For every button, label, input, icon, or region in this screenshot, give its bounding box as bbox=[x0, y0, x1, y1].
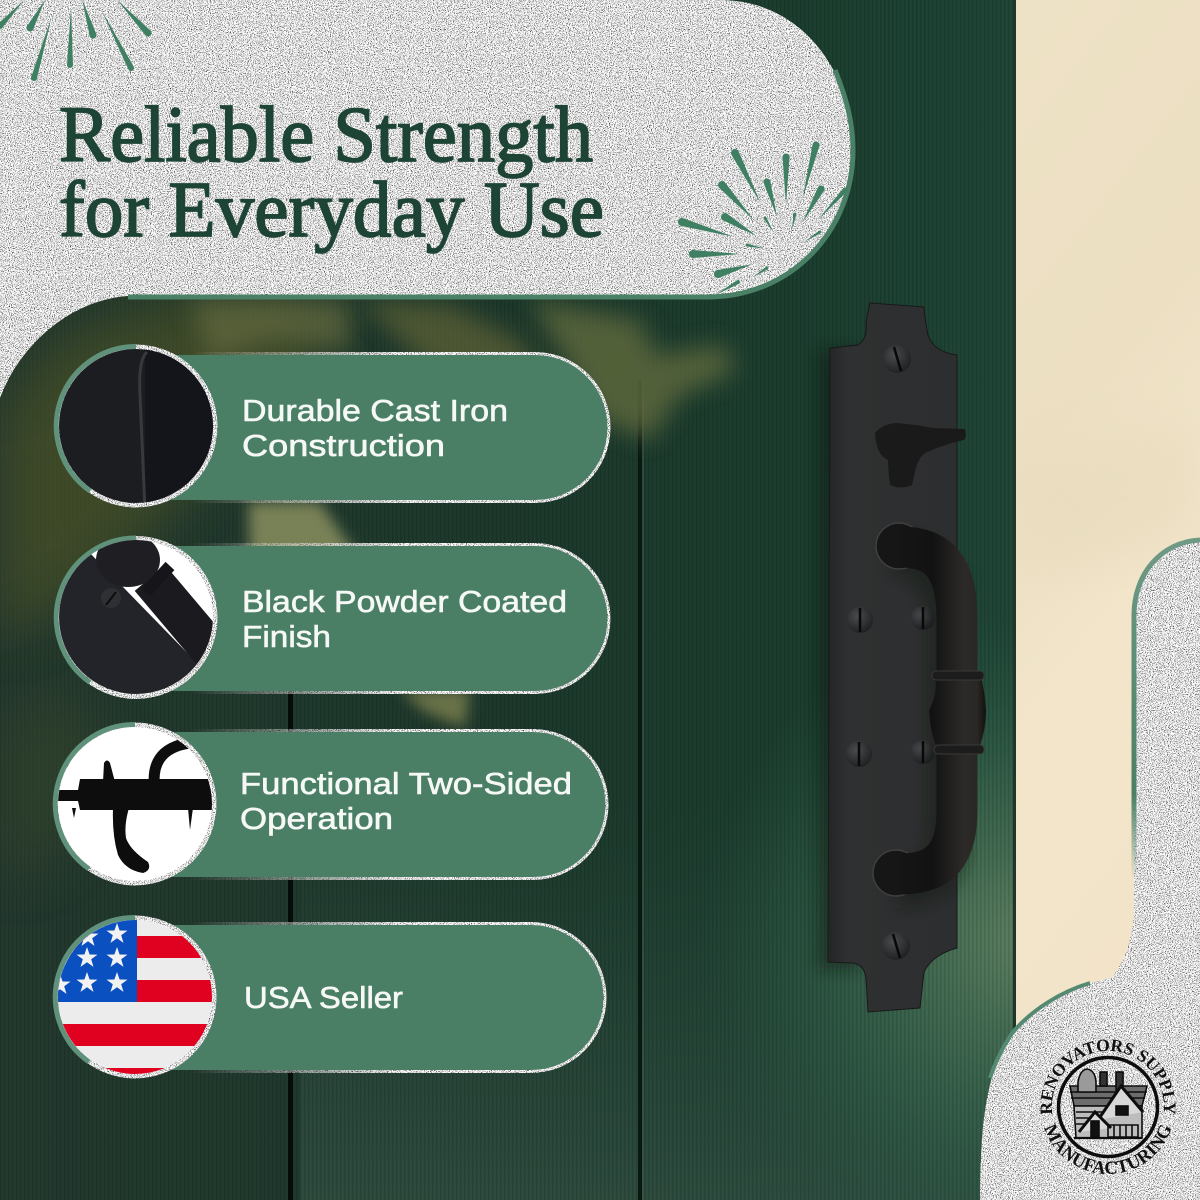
circular icon: American flag bbox=[50, 915, 219, 1083]
label: Functional Two-Sided bbox=[240, 766, 572, 801]
logo: Renovators Supply Manufacturing bbox=[1040, 1039, 1176, 1174]
circular photo: powder coated finish bbox=[50, 533, 220, 701]
feature 4: USA Seller bbox=[50, 915, 606, 1083]
label: Black Powder Coated bbox=[242, 584, 567, 619]
middle lower screws bbox=[846, 740, 935, 767]
bottom screw bbox=[882, 932, 910, 960]
feature 1: Durable Cast Iron Construction bbox=[54, 344, 610, 510]
label: Finish bbox=[242, 619, 331, 654]
door hardware: cast iron thumb-latch pull handle bbox=[818, 303, 986, 1012]
panel: title banner bbox=[0, 0, 853, 398]
logo house illustration bbox=[1070, 1069, 1147, 1138]
feature 3: Functional Two-Sided Operation bbox=[54, 722, 608, 887]
back plate bbox=[828, 303, 957, 1012]
pill bbox=[170, 352, 610, 503]
circular photo: two-sided latch bbox=[54, 722, 219, 887]
label: Construction bbox=[242, 428, 445, 463]
background: cream wall bbox=[1013, 0, 1200, 1029]
title heading: for Everyday Use bbox=[59, 167, 604, 254]
background: blurred leaves bbox=[0, 300, 735, 880]
top screw bbox=[883, 345, 911, 373]
pill bbox=[170, 729, 608, 880]
pill bbox=[170, 543, 610, 694]
handle grip bbox=[873, 523, 986, 896]
circular photo: cast iron texture bbox=[54, 344, 220, 510]
panel: logo corner bbox=[980, 538, 1200, 1200]
middle upper screws bbox=[847, 606, 935, 633]
plate shadow bbox=[818, 350, 860, 970]
title heading: Reliable Strength bbox=[59, 92, 593, 179]
feature 2: Black Powder Coated Finish bbox=[50, 533, 610, 701]
icon: top-left sparkle burst bbox=[0, 0, 153, 82]
label: USA Seller bbox=[244, 980, 403, 1015]
icon: lower-right sparkle burst bbox=[677, 141, 849, 297]
logo text top arc: RENOVATORS SUPPLY bbox=[1040, 1039, 1176, 1114]
pill bbox=[170, 922, 606, 1073]
logo text bottom arc: MANUFACTURING bbox=[1044, 1122, 1171, 1174]
thumb latch bbox=[875, 423, 966, 488]
label: Durable Cast Iron bbox=[242, 393, 508, 428]
label: Operation bbox=[240, 801, 393, 836]
